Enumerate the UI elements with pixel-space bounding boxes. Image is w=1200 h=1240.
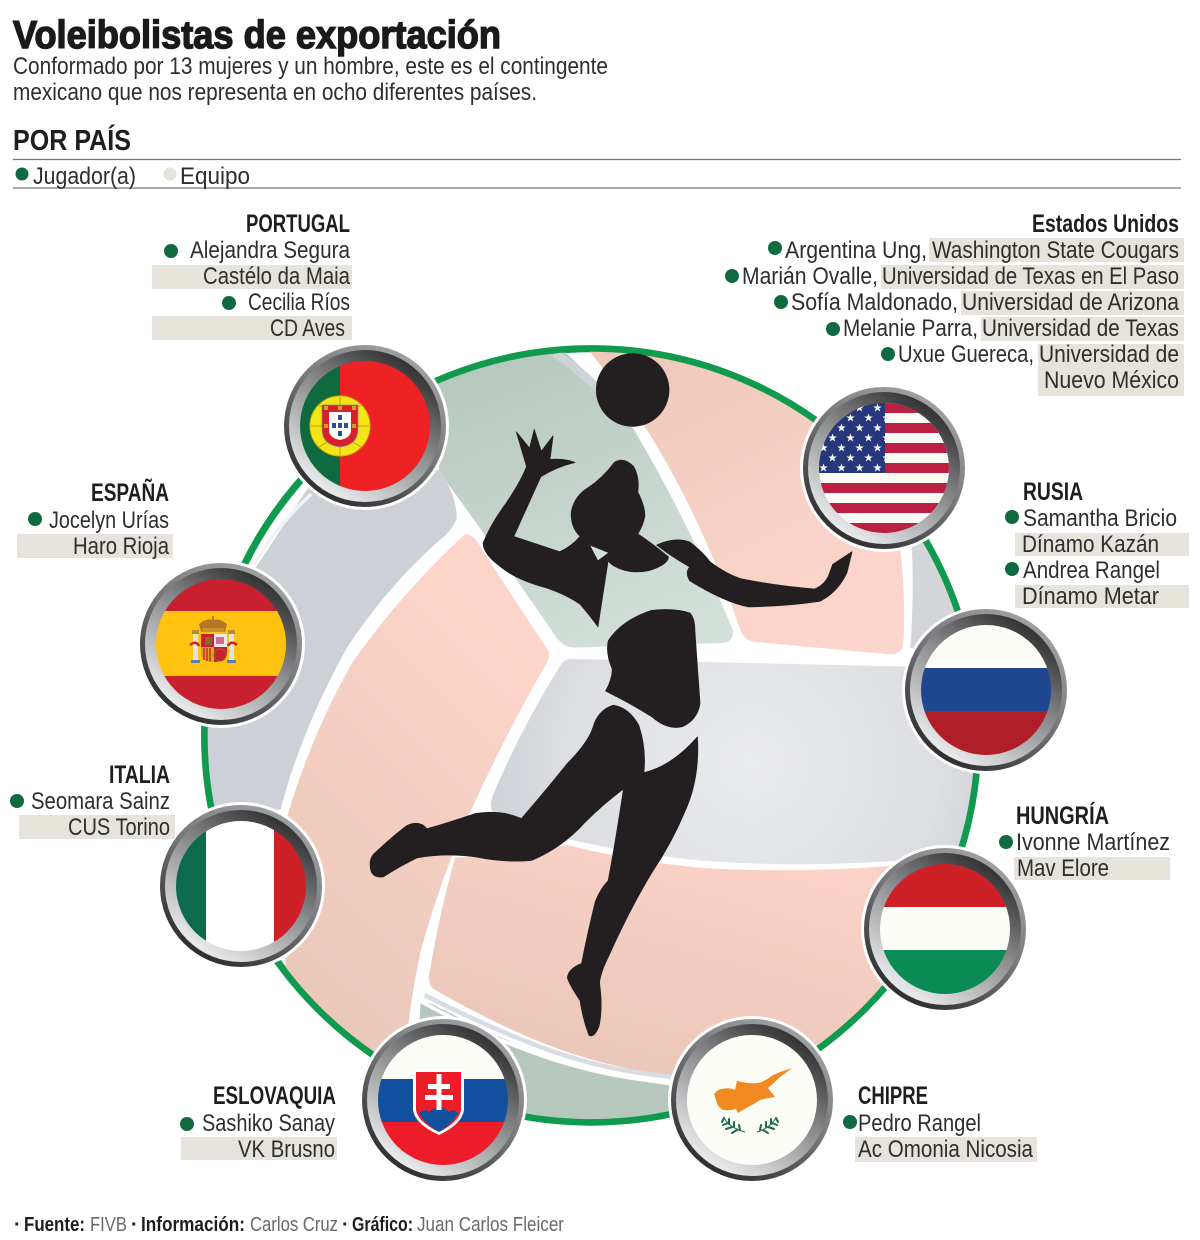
label: Eslovaquia: Sashiko Sanay [202,1110,335,1137]
label: Rusia: Dínamo Kazán [1022,531,1159,558]
label: Hungría [999,801,1170,882]
footer credits: Información: [141,1214,245,1236]
flag: Rusia [902,606,1070,774]
label: Estados Unidos [725,210,1184,396]
panel: left gray [200,468,457,814]
label: Rusia [1005,478,1189,610]
footer credits: Gráfico: [352,1214,413,1236]
label: Portugal [152,210,352,342]
label: Hungría: HUNGRÍA [1016,801,1109,830]
footer credits [14,1214,564,1236]
label: Hungría: Ivonne Martínez [1016,829,1170,856]
panel: bottom green [420,1002,670,1120]
footer credits: FIVB [90,1214,127,1236]
flag: Hungría [861,845,1029,1013]
label: Rusia: Dínamo Metar [1022,583,1159,610]
footer credits: Juan Carlos Fleicer [417,1214,564,1236]
label: Portugal: Cecilia Ríos [248,289,350,316]
label: Rusia: Samantha Bricio [1023,505,1177,532]
label: Portugal: Alejandra Segura [190,237,351,264]
subtitle [13,53,608,106]
legend: Equipo [180,163,250,190]
title: Voleibolistas de exportación [13,14,501,57]
label: Estados Unidos: Marián Ovalle, [742,263,878,290]
label: España [17,477,173,560]
label: Chipre [843,1082,1037,1163]
flag: Italia [157,802,325,970]
footer credits: · [14,1214,21,1236]
panel: top green [424,340,733,648]
panel: bottom pink [429,845,914,1076]
label: Portugal: Castélo da Maia [203,263,351,290]
subtitle: mexicano que nos representa en ocho diferentes países. [13,79,537,106]
label: Rusia: Andrea Rangel [1023,557,1160,584]
legend [16,163,250,190]
label: Estados Unidos: Uxue Guereca, [898,341,1034,368]
label: España: ESPAÑA [91,477,169,507]
player silhouette [370,429,852,1036]
label: Italia: Seomara Sainz [31,788,170,815]
label: Hungría: Mav Elore [1017,855,1109,882]
flag: España [137,560,305,728]
flag: Estados Unidos [800,384,968,552]
label: Estados Unidos: Universidad de [1039,341,1179,368]
label: Italia: CUS Torino [68,814,170,841]
footer credits: · [342,1214,349,1236]
label: Eslovaquia: VK Brusno [238,1136,335,1163]
label: Eslovaquia [180,1082,337,1163]
icon: ball [596,353,669,427]
label: Estados Unidos: Nuevo México [1044,367,1179,394]
label: Italia: ITALIA [109,761,170,789]
label: Estados Unidos: Melanie Parra, [843,315,978,342]
flag: Portugal [281,342,449,510]
footer credits: Fuente: [24,1214,85,1236]
label: Chipre: CHIPRE [858,1082,928,1110]
label: Chipre: Ac Omonia Nicosia [858,1136,1034,1163]
neck highlight [590,546,608,560]
label: Portugal: CD Aves [270,315,345,342]
panel: top pink [580,340,904,654]
panel: center gray [491,659,1001,864]
label: España: Haro Rioja [73,533,170,560]
label: España: Jocelyn Urías [49,507,169,534]
label: Rusia: RUSIA [1023,478,1083,506]
panel: left pink [285,534,549,1052]
label: Estados Unidos: Sofía Maldonado, [791,289,958,316]
footer credits: Carlos Cruz [250,1214,338,1236]
subtitle: Conformado por 13 mujeres y un hombre, este es el contingente [13,53,608,80]
legend: Jugador(a) [33,163,136,190]
flag: Chipre [668,1016,836,1184]
volleyball illustration [200,340,1001,1136]
panel: right gray [910,542,954,648]
label: Chipre: Pedro Rangel [858,1110,981,1137]
label: Italia [10,761,175,841]
label: Portugal: PORTUGAL [246,210,350,238]
footer credits: · [131,1214,138,1236]
heading: por país: POR PAÍS [13,123,131,157]
label: Estados Unidos: Argentina Ung, [785,237,927,264]
label: Eslovaquia: ESLOVAQUIA [213,1082,336,1110]
flag: Eslovaquia [359,1016,527,1184]
